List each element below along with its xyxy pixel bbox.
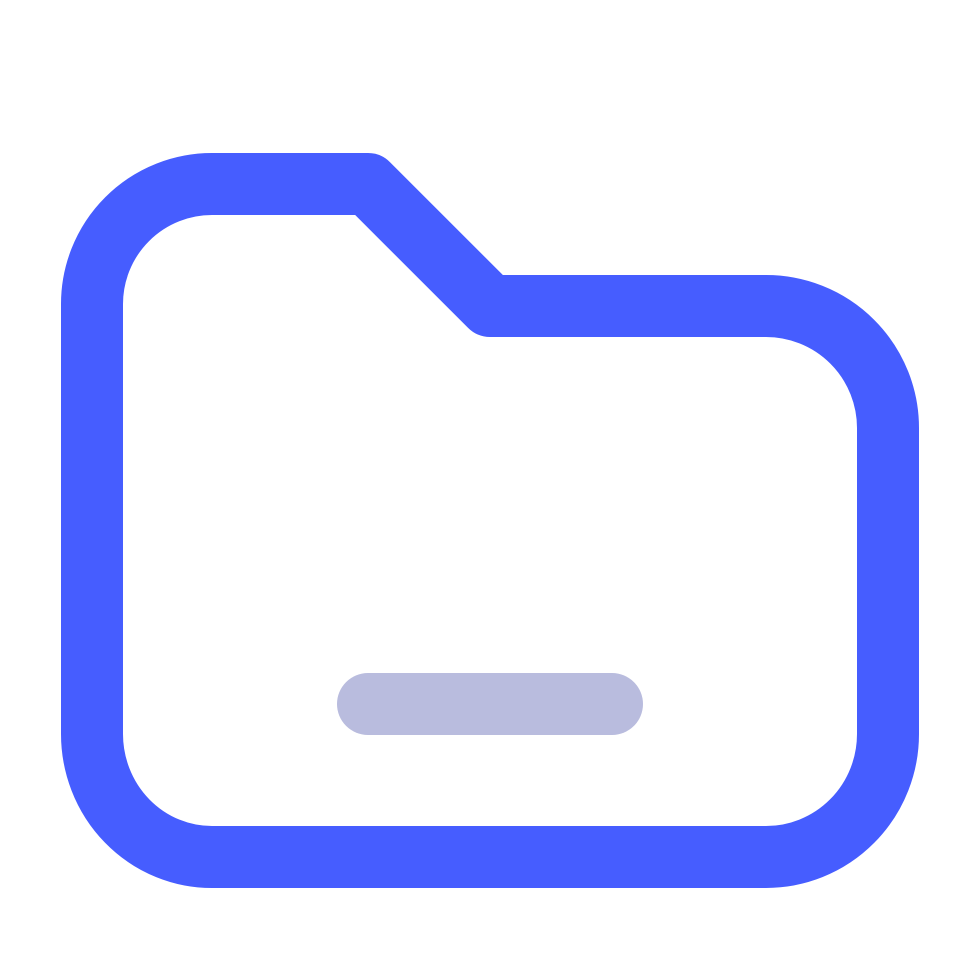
minus bar [337, 673, 643, 735]
folder outline [92, 184, 888, 857]
